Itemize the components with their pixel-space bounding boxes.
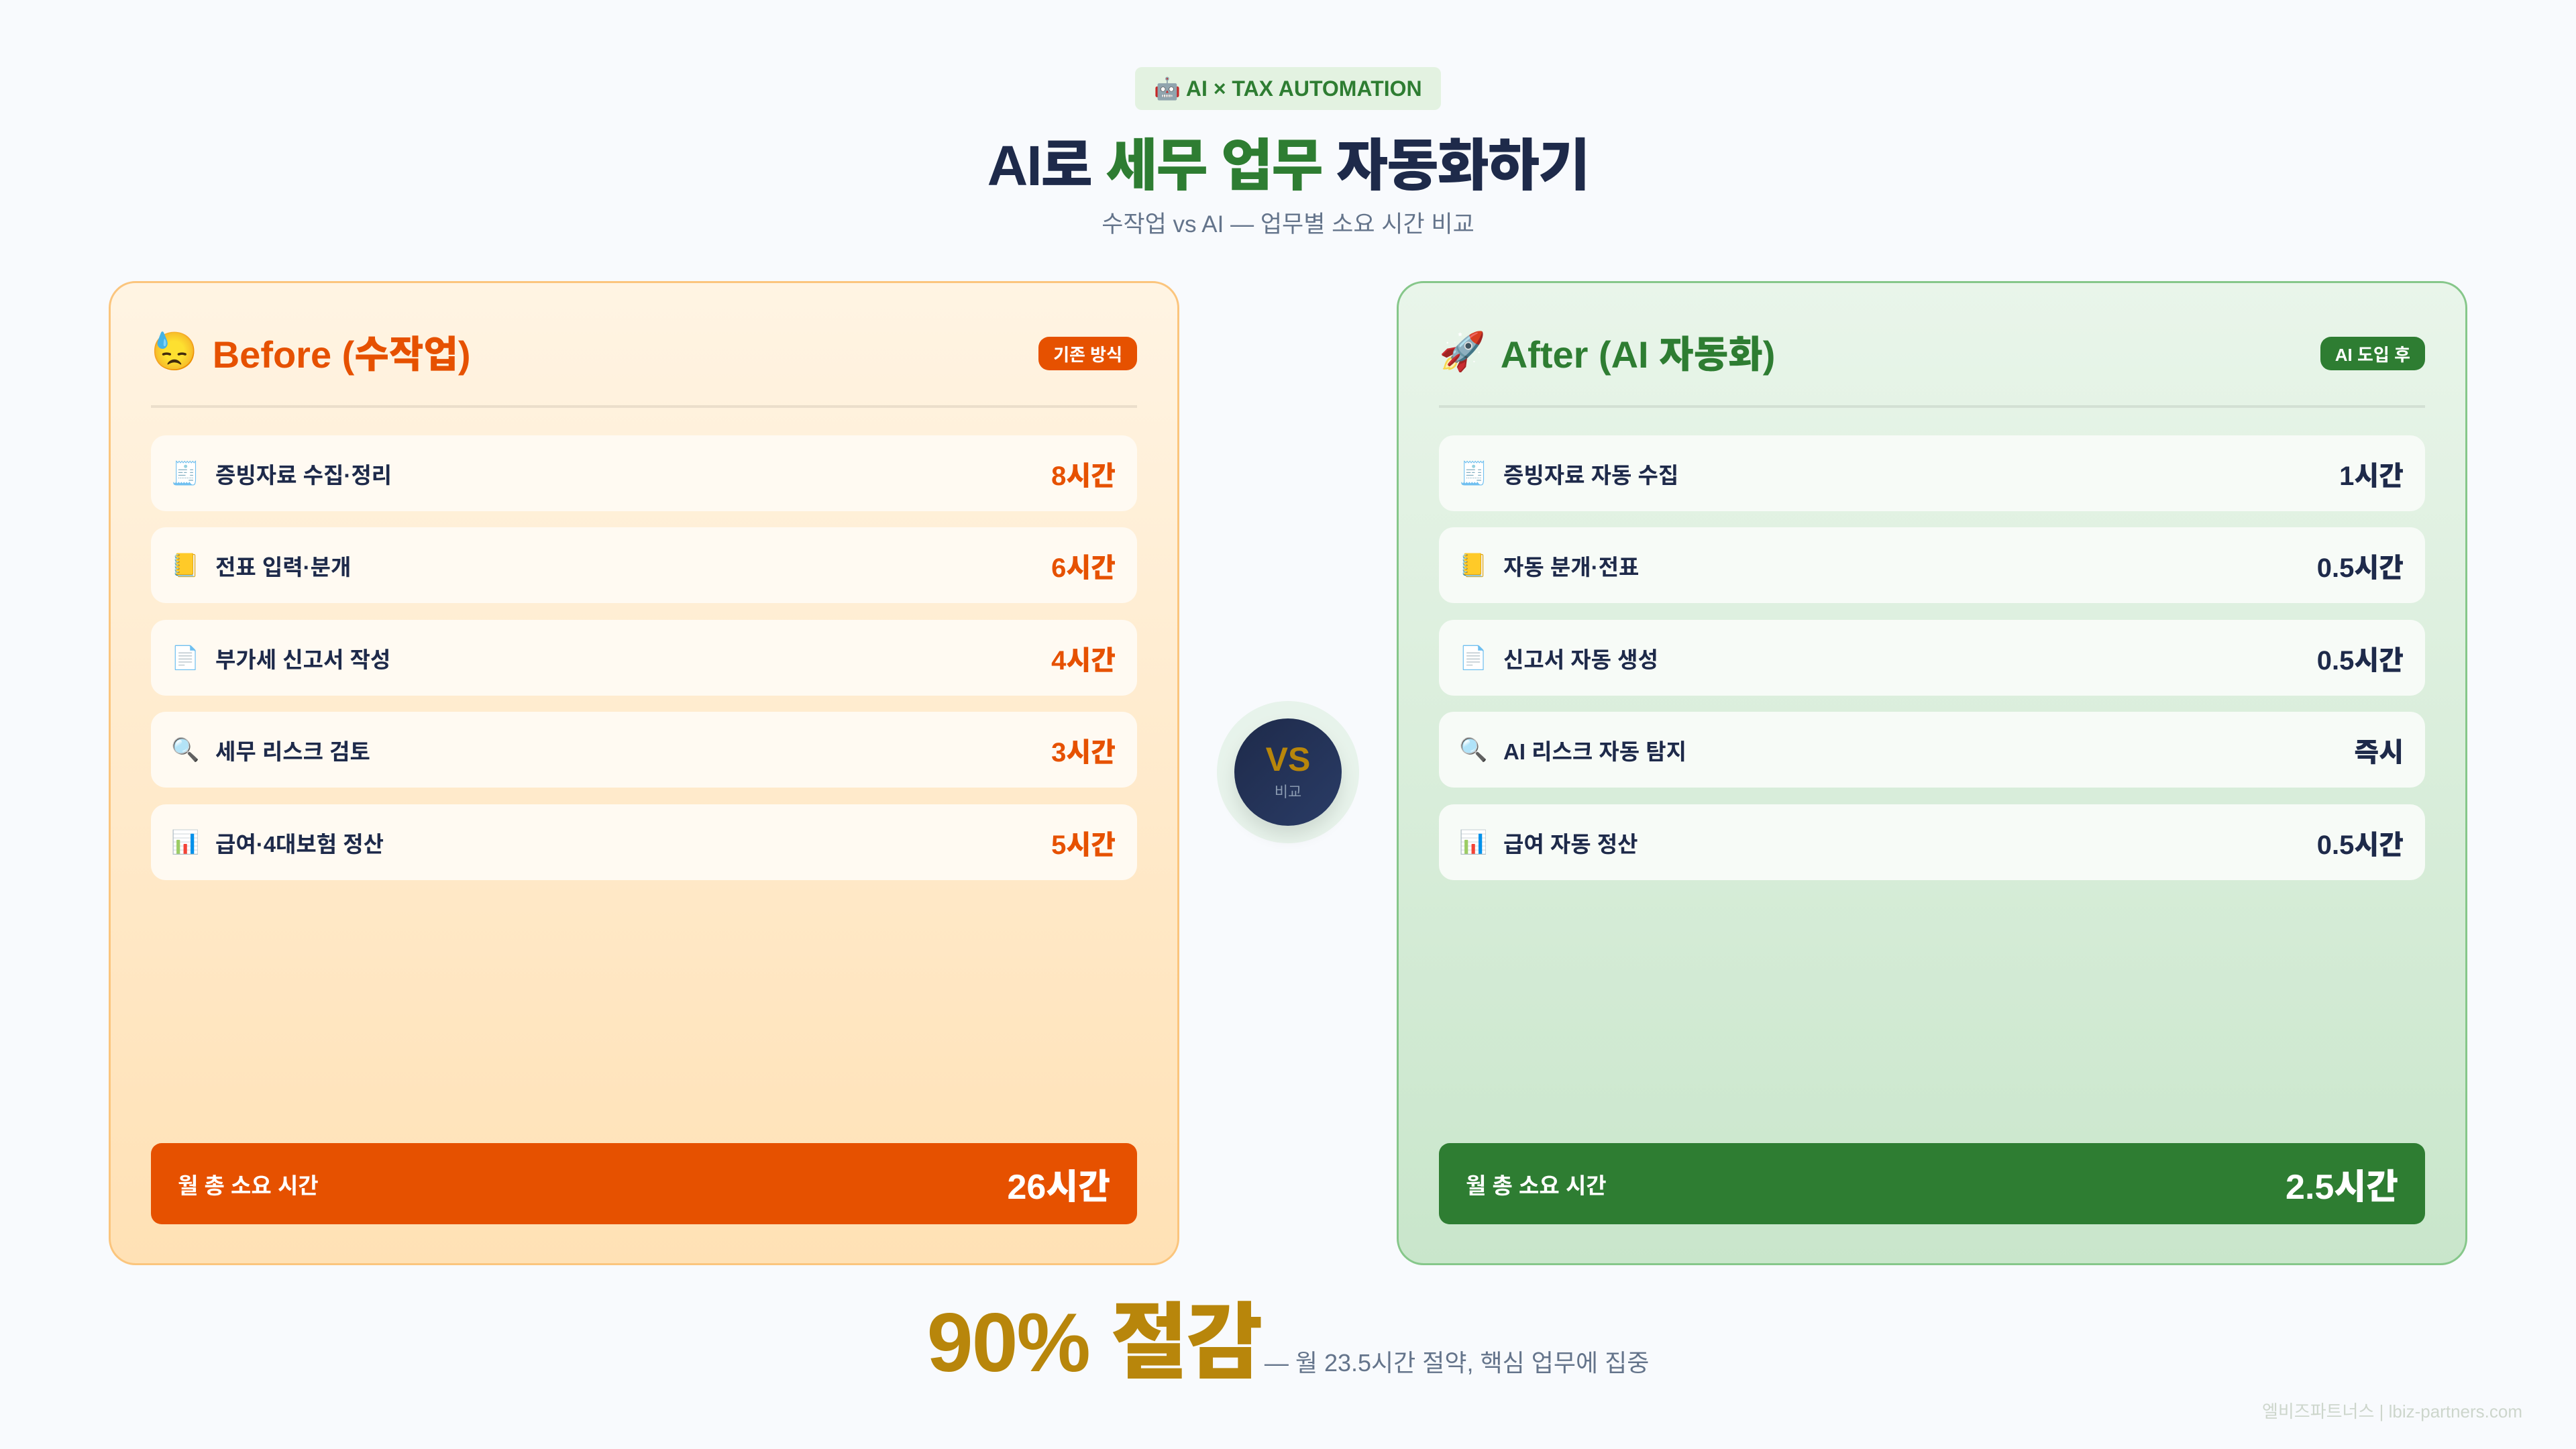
row 4: 즉시 [2354,738,2404,767]
row 1 [1439,435,2425,511]
row 4: 🔍 [171,737,199,762]
row 2 [151,527,1137,603]
row 5 [1439,804,2425,880]
after header: 🚀 [1439,330,1486,372]
before header: Before (수작업) [213,333,471,376]
row 3 [151,620,1137,696]
badge: 🤖 AI × TAX AUTOMATION [1154,76,1422,101]
row 2: 자동 분개·전표 [1503,554,1639,580]
row 1: 증빙자료 수집·정리 [215,463,392,487]
row 3: 신고서 자동 생성 [1503,647,1658,672]
after total [1439,1143,2425,1224]
vs circle [1234,718,1342,826]
panel: after [1397,281,2467,1265]
row 1: 1시간 [2339,462,2404,491]
row 5: 급여·4대보험 정산 [215,832,384,856]
row 2: 전표 입력·분개 [215,554,351,580]
title: AI로 세무 업무 자동화하기 [987,134,1589,197]
before header: 😓 [151,330,198,372]
row 5: 급여 자동 정산 [1503,832,1638,856]
row 4: 세무 리스크 검토 [215,739,370,763]
before total: 월 총 소요 시간 [178,1173,319,1198]
before header: 기존 방식 [1053,345,1122,365]
vs circle: VS [1266,741,1310,778]
after total: 2.5시간 [2286,1168,2398,1207]
panel: before [109,281,1179,1265]
vs circle: 비교 [1275,784,1301,800]
row 2: 6시간 [1051,553,1116,582]
before header [151,323,1137,408]
row 3: 📄 [171,645,199,671]
row 1: 🧾 [171,460,199,486]
row 5: 5시간 [1051,830,1116,860]
row 2: 📒 [171,553,199,578]
row 3: 📄 [1459,645,1487,671]
after header [1439,323,2425,408]
row 5: 0.5시간 [2317,830,2404,860]
row 1: 8시간 [1051,462,1116,491]
subtitle: 수작업 vs AI — 업무별 소요 시간 비교 [1102,211,1474,237]
before total [151,1143,1137,1224]
row 4 [151,712,1137,788]
row 1: 증빙자료 자동 수집 [1503,463,1678,487]
row 1: 🧾 [1459,460,1487,486]
row 2: 📒 [1459,553,1487,578]
row 4: AI 리스크 자동 탐지 [1503,739,1686,763]
before total: 26시간 [1007,1168,1110,1207]
row 5: 📊 [171,829,199,855]
footer summary: 90% 절감 — 월 23.5시간 절약, 핵심 업무에 집중 [927,1297,1649,1389]
after total: 월 총 소요 시간 [1466,1173,1607,1198]
watermark: 엘비즈파트너스 | lbiz-partners.com [2262,1401,2522,1421]
row 5 [151,804,1137,880]
after header: AI 도입 후 [2335,345,2410,365]
row 3 [1439,620,2425,696]
row 5: 📊 [1459,829,1487,855]
badge [1135,67,1441,110]
row 4: 🔍 [1459,737,1487,762]
row 3: 0.5시간 [2317,645,2404,675]
row 1 [151,435,1137,511]
row 4: 3시간 [1051,738,1116,767]
after header: After (AI 자동화) [1501,333,1775,376]
row 2 [1439,527,2425,603]
row 3: 4시간 [1051,645,1116,675]
row 2: 0.5시간 [2317,553,2404,582]
row 3: 부가세 신고서 작성 [215,647,390,672]
row 4 [1439,712,2425,788]
